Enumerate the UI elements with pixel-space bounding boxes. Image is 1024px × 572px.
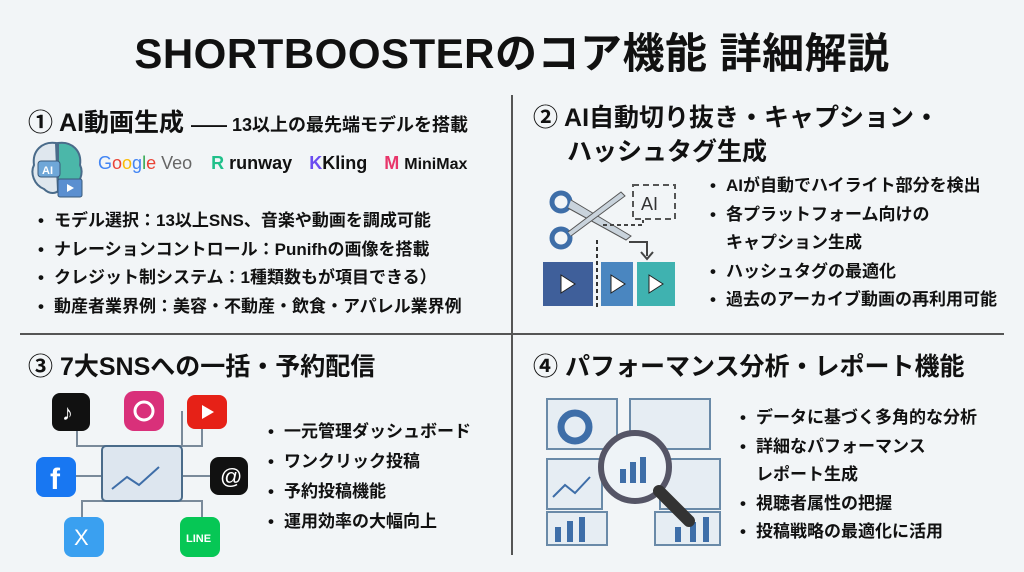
bullets 3: 運用効率の大幅向上: [284, 512, 437, 531]
panel: analytics: [533, 353, 977, 546]
bullets 3: ワンクリック投稿: [284, 452, 420, 471]
bullets 1: 動産者業界例：美容・不動産・飲食・アパレル業界例: [54, 296, 462, 316]
bullets 2: キャプション生成: [726, 233, 862, 252]
bullets 4: データに基づく多角的な分析: [756, 408, 977, 427]
bullets 3: [268, 422, 471, 531]
bullets 1: クレジット制システム：1種類数もが項目できる）: [54, 268, 437, 287]
icon: SNS hub: [36, 391, 248, 557]
icon: SNS hub: ♪: [62, 400, 73, 425]
heading 1: ① AI動画生成 —— 13以上の最先端モデルを搭載: [28, 109, 468, 137]
bullets 2: 各プラットフォーム向けの: [726, 204, 930, 224]
icon: SNS hub: f: [50, 463, 61, 496]
bullets 4: 視聴者属性の把握: [756, 494, 892, 512]
panel: AI video generation: [28, 109, 468, 316]
icon: magnifier over charts: [546, 398, 721, 546]
heading 2: ② AI自動切り抜き・キャプション・: [533, 104, 939, 132]
bullets 1: モデル選択：13以上SNS、音楽や動画を調成可能: [54, 211, 431, 230]
bullets 3: 予約投稿機能: [284, 482, 386, 501]
logos: Google Veo R runway KKling M MiniMax: [98, 153, 467, 173]
icon: scissors and film: [543, 184, 676, 307]
bullets 2: AIが自動でハイライト部分を検出: [726, 176, 981, 195]
heading 2: [533, 104, 939, 166]
panel: SNS scheduling: [28, 353, 471, 557]
icon: SNS hub: X: [74, 525, 89, 550]
icon: AI brain: [31, 142, 83, 198]
bullets 2: ハッシュタグの最適化: [726, 262, 896, 280]
bullets 4: レポート生成: [756, 465, 858, 484]
bullets 1: ナレーションコントロール：Punifhの画像を搭載: [54, 240, 430, 258]
bullets 4: [740, 408, 977, 541]
icon: scissors and film: AI: [641, 194, 658, 214]
icon: AI brain: AI: [42, 165, 53, 177]
panel: AI clipping: [533, 104, 997, 309]
heading 3: ③ 7大SNSへの一括・予約配信: [28, 353, 375, 381]
heading 2: ハッシュタグ生成: [567, 138, 767, 166]
bullets 4: 詳細なパフォーマンス: [756, 436, 926, 456]
heading 4: ④ パフォーマンス分析・レポート機能: [533, 353, 964, 381]
bullets 2: [710, 176, 997, 309]
title: SHORTBOOSTERのコア機能 詳細解説: [134, 30, 890, 77]
bullets 1: [38, 211, 462, 316]
bullets 2: 過去のアーカイブ動画の再利用可能: [726, 290, 997, 309]
icon: SNS hub: @: [220, 464, 242, 489]
bullets 4: 投稿戦略の最適化に活用: [756, 522, 943, 541]
bullets 3: 一元管理ダッシュボード: [284, 422, 471, 441]
icon: SNS hub: LINE: [186, 533, 211, 545]
